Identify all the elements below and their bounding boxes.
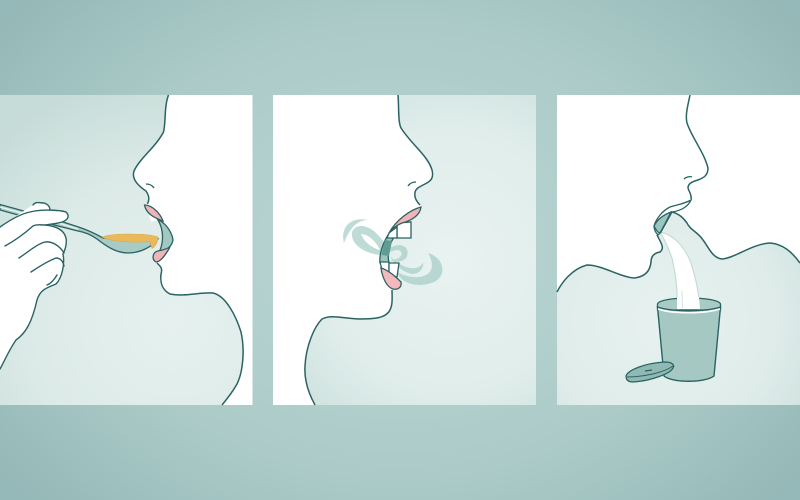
- panel 1 background: [0, 95, 252, 405]
- face silhouette: [273, 95, 433, 405]
- icon: open mouth with teeth: [380, 207, 421, 289]
- face silhouette: [557, 95, 800, 292]
- nostril: [408, 182, 416, 186]
- icon: spoon with honey: [0, 204, 158, 253]
- icon: mouth and lips: [144, 205, 173, 262]
- panel: pouring out into cup: [557, 95, 800, 405]
- panel 3 background: [557, 95, 800, 405]
- face outline: [557, 95, 800, 292]
- icon: hand: [0, 202, 68, 369]
- icon: cup lid: [626, 362, 674, 382]
- panel: breath from mouth: [273, 95, 536, 405]
- face outline: [305, 95, 433, 405]
- icon: white liquid stream: [660, 232, 700, 310]
- icon: mouth and tongue: [654, 200, 691, 235]
- icon: breath swirls: [343, 219, 442, 285]
- panel: spoon feeding: [0, 95, 252, 405]
- face silhouette: [133, 95, 252, 405]
- nostril: [146, 184, 154, 188]
- panel 2 background: [273, 95, 536, 405]
- icon: cup: [658, 291, 720, 381]
- nostril: [684, 177, 692, 179]
